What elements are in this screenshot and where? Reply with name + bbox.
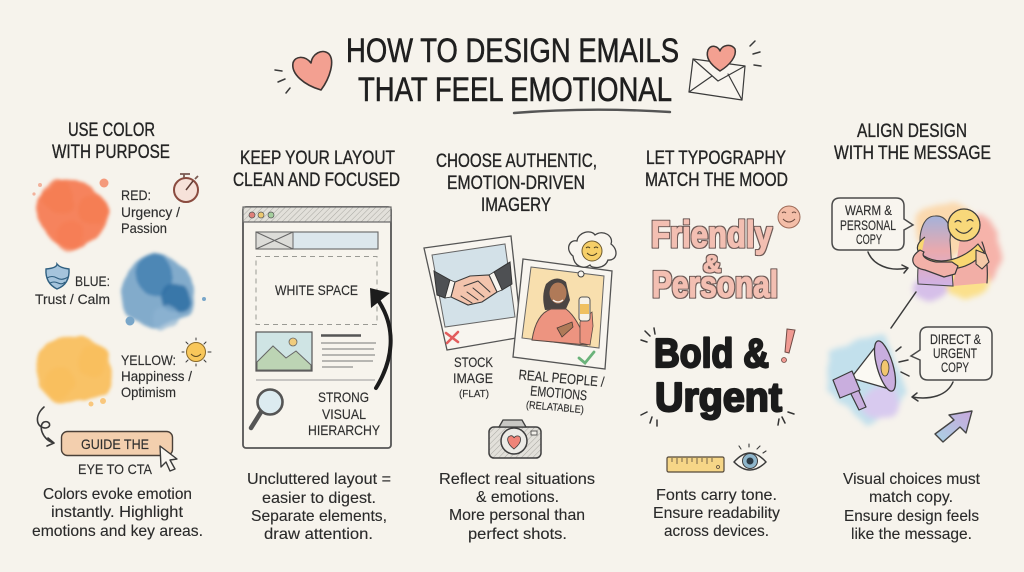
yellow paint blob — [36, 336, 112, 406]
panel: keep your layout clean — [233, 147, 400, 543]
heading: imagery — [436, 150, 597, 216]
yellow label — [121, 352, 192, 400]
body text: color — [32, 486, 203, 540]
CTA button: GUIDE THE — [81, 436, 149, 452]
bold type sample: Bold & — [654, 330, 769, 376]
heading: align: ALIGN DESIGN — [857, 120, 967, 142]
red label: RED: — [121, 187, 151, 203]
yellow label: Optimism — [121, 384, 176, 400]
icon: heart with motion marks — [275, 52, 332, 93]
heading: use color: WITH PURPOSE — [52, 141, 170, 163]
body text: typography — [653, 487, 780, 540]
pastel wash behind megaphone — [828, 332, 908, 425]
real people label — [516, 366, 605, 418]
body text: imagery: More personal than — [449, 507, 585, 524]
body text: typography: across devices. — [664, 523, 769, 540]
bubble: direct copy: DIRECT & — [930, 332, 981, 347]
icon: megaphone — [833, 339, 909, 410]
body text: imagery — [439, 471, 595, 543]
body text: imagery: & emotions. — [476, 489, 559, 506]
body text: imagery: Reflect real situations — [439, 471, 595, 488]
blue paint blob — [120, 257, 206, 330]
bold type sample — [654, 330, 782, 420]
body text: align: like the message. — [851, 526, 972, 543]
icon: hugging figures — [913, 209, 989, 286]
handshake — [434, 262, 512, 305]
heading: imagery: IMAGERY — [481, 194, 551, 216]
browser window — [243, 207, 391, 448]
body text: typography: Fonts carry tone. — [656, 487, 777, 504]
image placeholder — [256, 332, 312, 371]
icon: smiling sun — [182, 338, 211, 366]
stock image label: STOCK — [454, 354, 494, 370]
icon: envelope with heart — [689, 41, 761, 100]
body text: layout: Uncluttered layout = — [247, 471, 391, 488]
icon: eye — [734, 444, 766, 470]
heading: typography — [645, 147, 788, 191]
icon: ruler — [667, 457, 724, 472]
real people label: EMOTIONS — [530, 382, 588, 403]
yellow label: YELLOW: — [121, 352, 176, 368]
body text: color: Colors evoke emotion — [43, 486, 192, 503]
body text: align: Visual choices must — [843, 471, 981, 488]
yellow arm — [917, 237, 984, 269]
icon: cursor — [160, 446, 177, 471]
red label — [121, 187, 180, 236]
icon: magnifier — [251, 390, 282, 428]
title: THAT FEEL EMOTIONAL — [358, 71, 672, 109]
icon: green check — [579, 352, 594, 363]
connector line — [891, 292, 916, 328]
panel: authentic imagery — [424, 150, 616, 543]
arrow: direct to megaphone — [912, 382, 953, 401]
white space area — [256, 256, 377, 324]
body text: align: Ensure design feels — [844, 508, 979, 525]
real people label: (RELATABLE) — [525, 399, 584, 416]
panel: use color with purpose — [32, 119, 211, 540]
body text: layout: draw attention. — [264, 526, 373, 543]
blue label: BLUE: — [75, 273, 110, 289]
stock photo — [424, 236, 522, 350]
body text: align — [843, 471, 981, 543]
friendly type sample: Friendly — [651, 214, 772, 255]
heading: typography: MATCH THE MOOD — [645, 169, 788, 191]
header bar — [256, 232, 378, 249]
hierarchy label — [308, 389, 381, 438]
heading: imagery: CHOOSE AUTHENTIC, — [436, 150, 597, 172]
heading: layout — [233, 147, 400, 191]
hierarchy label: STRONG — [318, 389, 369, 405]
pastel wash behind hug — [913, 202, 1001, 301]
heading: use color — [52, 119, 170, 163]
friendly type sample — [651, 214, 778, 305]
bold type sample: Urgent — [655, 374, 782, 420]
title — [346, 32, 679, 113]
pink arm — [913, 250, 958, 277]
arrow: hierarchy — [370, 288, 391, 388]
arrow: squiggle to CTA — [37, 407, 54, 446]
heading: imagery: EMOTION-DRIVEN — [447, 172, 585, 194]
panel: align design — [828, 120, 1001, 543]
woman — [532, 278, 593, 345]
body text: color: emotions and key areas. — [32, 523, 203, 540]
bubble: direct copy — [911, 327, 992, 380]
heading: use color: USE COLOR — [68, 119, 155, 141]
red label: Urgency / — [121, 204, 180, 220]
hierarchy label: VISUAL — [322, 406, 366, 422]
bubble: warm copy: PERSONAL — [840, 218, 896, 233]
body text: layout: easier to digest. — [262, 490, 376, 507]
CTA button: EYE TO CTA — [78, 461, 153, 477]
bubble: warm copy: WARM & — [845, 203, 892, 218]
icon: red cross — [446, 332, 458, 343]
blue label: Trust / Calm — [35, 291, 110, 307]
icon: camera — [489, 420, 541, 458]
emphasis marks — [641, 328, 794, 426]
heading: typography: LET TYPOGRAPHY — [646, 147, 786, 169]
icon: pastel arrow — [935, 411, 972, 442]
title: HOW TO DESIGN EMAILS — [346, 32, 679, 70]
bubble: warm copy — [832, 198, 913, 250]
body text: align: match copy. — [869, 489, 953, 506]
panel: typography — [641, 147, 800, 540]
icon: shield — [46, 264, 69, 289]
body text: layout — [247, 471, 391, 543]
body text: typography: Ensure readability — [653, 505, 780, 522]
red label: Passion — [121, 220, 167, 236]
stock image label: IMAGE — [453, 370, 493, 386]
CTA button — [62, 432, 172, 477]
heading: layout: KEEP YOUR LAYOUT — [240, 147, 395, 169]
real people label: REAL PEOPLE / — [518, 366, 605, 390]
icon: smile — [778, 206, 800, 228]
real people photo — [513, 259, 612, 369]
body text: color: instantly. Highlight — [51, 504, 184, 521]
bubble: direct copy: COPY — [941, 360, 969, 375]
heading: align — [834, 120, 991, 164]
friendly type sample: & — [703, 251, 721, 278]
blue label — [35, 273, 110, 307]
heading: align: WITH THE MESSAGE — [834, 142, 991, 164]
bubble: warm copy: COPY — [856, 232, 882, 247]
white space area: WHITE SPACE — [275, 282, 358, 298]
friendly type sample: Personal — [652, 264, 778, 305]
thought bubble — [569, 232, 616, 277]
heading: layout: CLEAN AND FOCUSED — [233, 169, 400, 191]
body text: imagery: perfect shots. — [468, 526, 567, 543]
icon: exclamation — [782, 329, 795, 362]
hierarchy label: HIERARCHY — [308, 422, 381, 438]
red paint blob — [32, 178, 108, 249]
bubble: direct copy: URGENT — [933, 346, 977, 361]
stock image label — [453, 354, 494, 400]
icon: stopwatch — [174, 174, 198, 202]
arrow: warm to hug — [868, 252, 908, 273]
body text: layout: Separate elements, — [251, 508, 387, 525]
yellow label: Happiness / — [121, 368, 192, 384]
stock image label: (FLAT) — [459, 388, 489, 400]
text lines — [321, 336, 376, 367]
